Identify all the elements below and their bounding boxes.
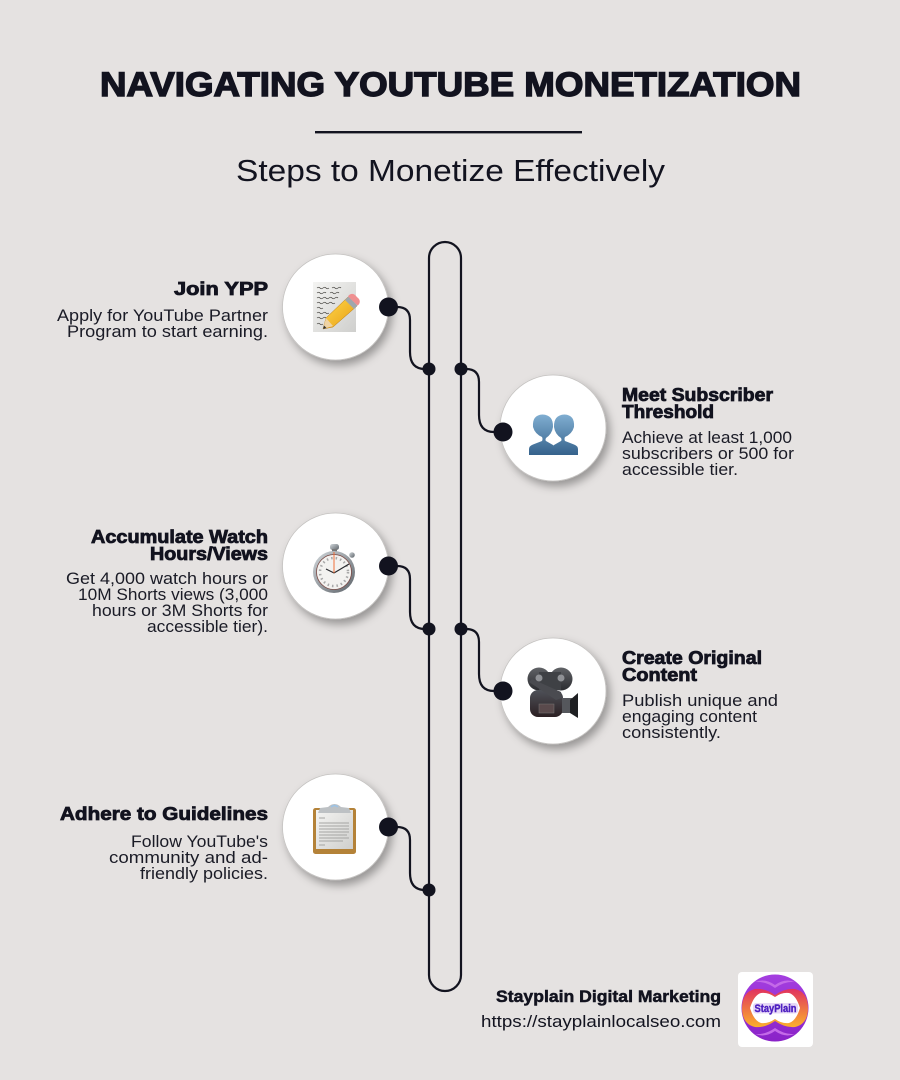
heading: Content: [622, 665, 697, 685]
description: accessible tier).: [147, 618, 268, 636]
description: subscribers or 500 for: [622, 445, 795, 463]
description: hours or 3M Shorts for: [92, 602, 269, 620]
heading: Meet Subscriber: [622, 385, 773, 405]
heading: [622, 385, 773, 422]
description: Apply for YouTube Partner: [57, 307, 269, 325]
icon: memo and pencil: [313, 282, 360, 332]
node: [379, 818, 398, 836]
logo: StayPlain: StayPlain: [754, 1003, 797, 1015]
icon circle: [500, 375, 606, 481]
heading: Threshold: [622, 402, 714, 422]
icon: movie camera: [528, 668, 578, 718]
description: [66, 570, 269, 636]
heading: Accumulate Watch: [91, 527, 268, 547]
description: [109, 833, 268, 883]
description: friendly policies.: [140, 865, 268, 883]
icon circle: [500, 638, 606, 744]
timeline track: [429, 242, 461, 991]
node: [494, 682, 512, 700]
title: NAVIGATING YOUTUBE MONETIZATION: [100, 66, 801, 104]
heading: Join YPP: [174, 279, 268, 299]
description: consistently.: [622, 724, 721, 742]
description: accessible tier.: [622, 461, 738, 479]
description: [622, 429, 795, 479]
icon: stopwatch: [313, 544, 355, 593]
icon circle: [282, 254, 388, 360]
logo: StayPlain: [738, 972, 813, 1047]
description: Publish unique and: [622, 692, 778, 710]
heading: [91, 527, 268, 564]
icon: busts in silhouette: [529, 414, 578, 455]
step 1: Join YPP: [57, 254, 388, 360]
footer: company name and URL: [481, 988, 721, 1031]
footer: company name and URL: Stayplain Digital Marketing: [496, 988, 721, 1006]
step 3: Accumulate Watch Hours/Views: [66, 513, 398, 636]
footer: company name and URL: https://stayplainlocalseo.com: [481, 1013, 721, 1031]
description: Program to start earning.: [67, 323, 268, 341]
step 2: Meet Subscriber Threshold: [494, 375, 795, 481]
connectors and timeline nodes: [389, 307, 503, 896]
heading: Hours/Views: [150, 544, 268, 564]
node: [379, 556, 398, 576]
node: step 1: [379, 298, 398, 316]
step 5: Adhere to Guidelines: [60, 774, 398, 883]
icon circle: [282, 513, 388, 619]
description: community and ad-: [109, 849, 268, 867]
description: Follow YouTube's: [131, 833, 268, 851]
heading: Adhere to Guidelines: [60, 804, 268, 824]
description: [57, 307, 269, 341]
description: Get 4,000 watch hours or: [66, 570, 269, 588]
description: engaging content: [622, 708, 757, 726]
description: Achieve at least 1,000: [622, 429, 792, 447]
icon: clipboard: [313, 804, 356, 854]
node: [494, 422, 512, 442]
description: 10M Shorts views (3,000: [78, 586, 268, 604]
heading: Create Original: [622, 648, 762, 668]
subtitle: Steps to Monetize Effectively: [236, 154, 666, 188]
description: [622, 692, 778, 742]
step 4: Create Original Content: [494, 638, 778, 744]
icon circle: [282, 774, 388, 880]
heading: [622, 648, 762, 685]
